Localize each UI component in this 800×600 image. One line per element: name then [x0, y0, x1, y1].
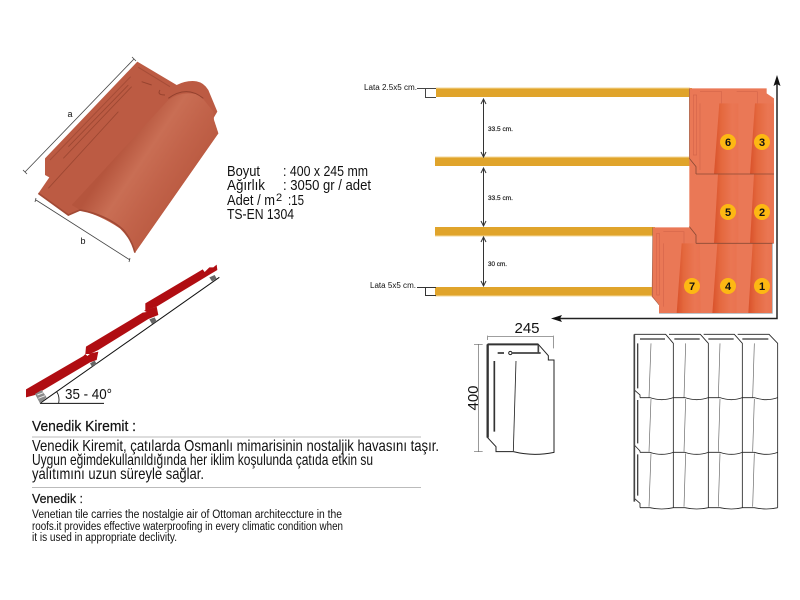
- Turkish description: Uygun eğimdekullanıldığında her iklim koşulunda çatıda etkin su: [32, 452, 373, 469]
- batten label: Lata 5x5: [370, 281, 436, 296]
- tile layout grid drawing: [634, 334, 778, 509]
- spacing arrow 33.5 cm upper: [481, 99, 513, 157]
- battens (lata): [435, 88, 692, 296]
- specifications text block: 2: [276, 192, 282, 204]
- spacing arrow 33.5 cm middle: 33.5 cm.: [488, 196, 513, 202]
- spacing arrow 33.5 cm upper: 33.5 cm.: [488, 127, 513, 133]
- number badges 1-7: 7: [689, 281, 695, 293]
- stacked terracotta tiles: [652, 88, 774, 313]
- number badges 1-7: 2: [759, 207, 765, 219]
- batten label: Lata 2.5x5: Lata 2.5x5 cm.: [364, 83, 417, 92]
- specifications text block: Ağırlık: [227, 178, 266, 194]
- spacing arrow 33.5 cm middle: [481, 168, 513, 226]
- dimension a: [23, 57, 136, 174]
- dimension a: a: [67, 109, 73, 119]
- number badges 1-7: 3: [759, 137, 765, 149]
- specifications text block: Adet / m: [227, 193, 275, 209]
- dimension b: [35, 198, 130, 262]
- front-view tile drawing 400 x 245: [465, 320, 554, 454]
- English description: [32, 509, 343, 544]
- batten label: Lata 5x5: Lata 5x5 cm.: [370, 281, 416, 290]
- specifications text block: TS-EN 1304: [227, 207, 294, 223]
- spacing arrow 30 cm: 30 cm.: [488, 262, 507, 268]
- heading: Venedik: Venedik :: [32, 491, 83, 506]
- number badges 1-7: 4: [725, 281, 732, 293]
- specifications text block: : 400 x 245 mm: [283, 164, 368, 180]
- number badges 1-7: 1: [759, 281, 765, 293]
- spacing arrow 30 cm: [481, 237, 507, 286]
- specifications text block: : 3050 gr / adet: [283, 178, 371, 194]
- number badges 1-7: 5: [725, 207, 731, 219]
- axis arrows: [551, 75, 780, 322]
- Turkish description: yalıtımını uzun süreyle sağlar.: [32, 466, 204, 483]
- dimension b: b: [80, 236, 86, 246]
- batten label: Lata 2.5x5: [364, 83, 436, 98]
- Turkish description: Venedik Kiremit, çatılarda Osmanlı mimarisinin nostaljik havasını taşır.: [32, 438, 439, 455]
- specifications text block: [227, 164, 371, 223]
- roof section diagram 35-40 degrees: 35 - 40°: [65, 386, 112, 403]
- number badges 1-7: [684, 134, 770, 294]
- number badges 1-7: 6: [725, 137, 731, 149]
- front-view tile drawing 400 x 245: 245: [514, 320, 540, 337]
- English description: Venetian tile carries the nostalgie air of Ottoman architeccture in the: [32, 509, 342, 521]
- heading: Venedik Kiremit: Venedik Kiremit :: [32, 418, 136, 435]
- English description: roofs.it provides effective waterproofing in every climatic condition when: [32, 521, 343, 533]
- specifications text block: Boyut: [227, 164, 260, 180]
- specifications text block: :15: [288, 193, 304, 209]
- roof section diagram 35-40 degrees: [26, 265, 219, 403]
- tile photo with dimensions a and b: [23, 57, 218, 262]
- Turkish description: [32, 438, 439, 483]
- English description: it is used in appropriate declivity.: [32, 532, 177, 544]
- front-view tile drawing 400 x 245: 400: [465, 385, 482, 411]
